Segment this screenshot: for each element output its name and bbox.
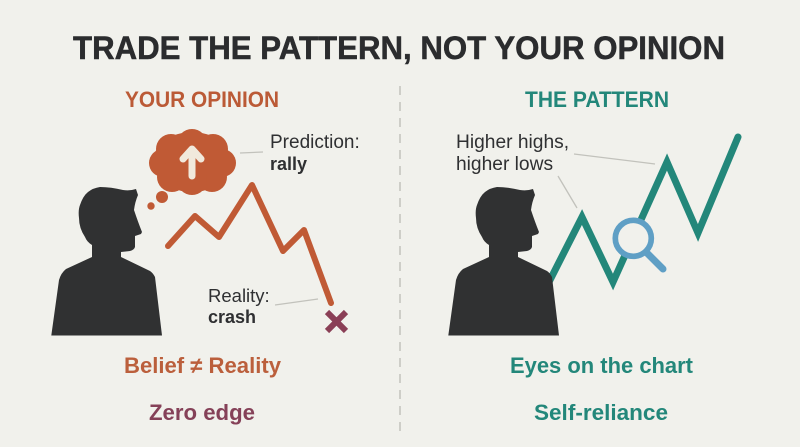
label: higher highs, higher lows: higher lows: [456, 154, 553, 175]
caption: zero edge: Zero edge: [149, 400, 255, 425]
caption: self-reliance: Self-reliance: [534, 400, 668, 425]
caption: belief vs reality: Belief ≠ Reality: [124, 353, 281, 378]
title: TRADE THE PATTERN, NOT YOUR OPINION: [73, 30, 725, 66]
chart: falling price line: [168, 185, 331, 303]
icon: up arrow: [183, 149, 201, 176]
label: reality: Reality:: [208, 285, 270, 306]
icon: magnifying glass: [615, 220, 663, 269]
icon: person silhouette: [448, 187, 559, 336]
icon: red cross: [327, 312, 346, 331]
label: higher highs, higher lows: Higher highs,: [456, 132, 569, 153]
label: prediction: rally: [270, 154, 307, 174]
panel: the pattern: [448, 87, 738, 425]
chart: rising price line: [548, 137, 738, 284]
label: reality: crash: [208, 307, 256, 327]
icon: person silhouette: [51, 187, 162, 336]
label: prediction: Prediction:: [270, 132, 360, 153]
panel: your opinion: [51, 87, 360, 425]
icon: thought cloud: [147, 129, 236, 210]
caption: eyes on the chart: Eyes on the chart: [510, 353, 693, 378]
heading: your opinion: YOUR OPINION: [125, 87, 279, 112]
heading: the pattern: THE PATTERN: [525, 87, 669, 112]
